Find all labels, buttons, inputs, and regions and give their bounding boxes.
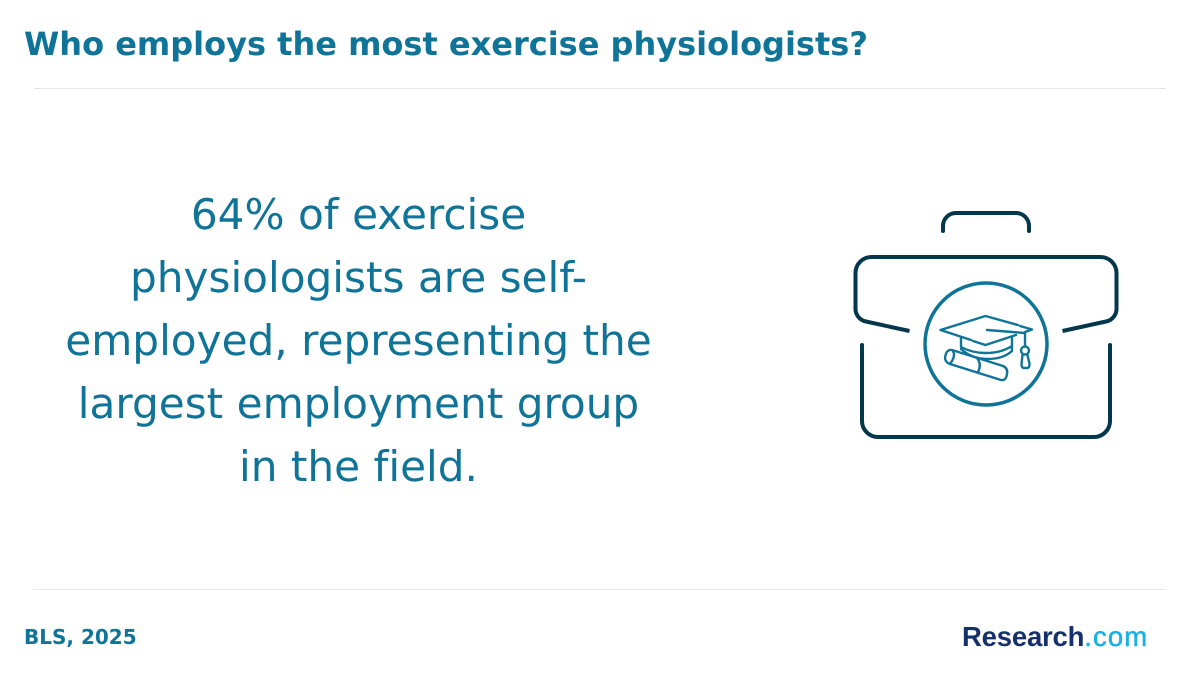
graduation cap and diploma xyxy=(940,316,1032,380)
source note: BLS, 2025 xyxy=(24,625,137,649)
logo: Research.com: Research.com xyxy=(962,621,1148,652)
main statement text: 64% of exercise xyxy=(191,190,526,239)
main statement text xyxy=(65,190,652,491)
icon: briefcase with graduation cap xyxy=(853,211,1118,439)
emblem circle xyxy=(925,283,1047,405)
briefcase outline xyxy=(855,213,1117,437)
main statement text: physiologists are self- xyxy=(130,253,587,302)
main statement text: largest employment group xyxy=(78,379,639,428)
main statement text: employed, representing the xyxy=(65,316,652,365)
main statement text: in the field. xyxy=(239,442,478,491)
title: Who employs the most exercise physiologists? xyxy=(24,25,868,63)
